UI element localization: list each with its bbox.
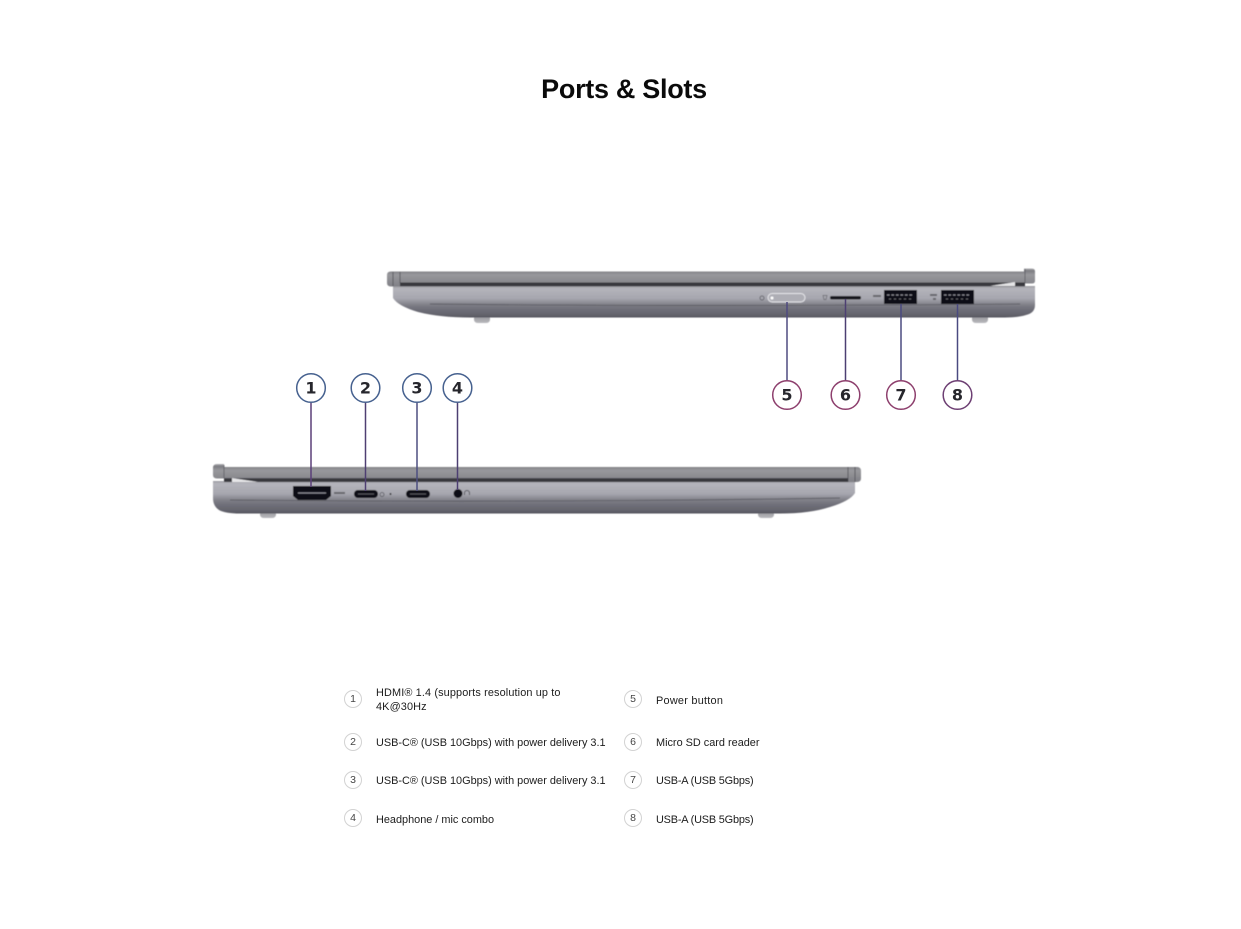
legend item 4: 4 — [350, 812, 356, 824]
USB-A port — [930, 290, 974, 304]
callout 4 — [443, 374, 472, 402]
laptop: right side view — [387, 268, 1035, 323]
lid — [213, 464, 861, 482]
legend item 3 — [344, 771, 606, 789]
callout 6: 6 — [840, 386, 851, 404]
feet — [474, 314, 988, 323]
base — [393, 286, 1035, 318]
legend item 5: Power button — [656, 695, 723, 707]
lid — [387, 268, 1035, 286]
callout 7: 7 — [895, 386, 907, 404]
legend item 7: 7 — [630, 774, 636, 786]
legend item 6: 6 — [630, 736, 636, 748]
legend item 2: 2 — [350, 736, 356, 748]
callout 6 — [831, 381, 860, 409]
hinge gap — [400, 282, 1025, 286]
legend item 8: 8 — [630, 812, 636, 824]
power button — [760, 294, 805, 302]
callout 1: 1 — [305, 378, 317, 398]
headphone jack — [454, 489, 470, 498]
hinge gap — [224, 478, 848, 482]
legend item 5 — [624, 690, 723, 708]
legend item 7: USB-A (USB 5Gbps) — [656, 775, 753, 787]
callout 3: 3 — [411, 378, 423, 398]
callout lines — [311, 299, 958, 491]
USB-A port — [873, 290, 917, 304]
callout 4: 4 — [452, 378, 463, 398]
HDMI port — [293, 486, 345, 500]
base — [213, 481, 855, 514]
highlight wedge — [232, 478, 258, 482]
legend item 4 — [344, 809, 494, 827]
callout 5 — [773, 381, 801, 409]
highlight wedge — [990, 282, 1015, 286]
title: Ports & Slots — [541, 74, 707, 104]
legend item 6 — [624, 733, 760, 751]
legend item 1: HDMI® 1.4 (supports resolution up to 4K@30Hz — [376, 687, 561, 713]
legend item 1: 1 — [350, 693, 356, 705]
legend item 8 — [624, 809, 753, 827]
callout 5: 5 — [781, 386, 793, 404]
callout 8 — [943, 381, 972, 409]
callout 2 — [351, 374, 380, 402]
callout 3 — [403, 374, 431, 402]
legend item 7 — [624, 771, 753, 789]
callout 7 — [887, 381, 915, 409]
legend item 8: USB-A (USB 5Gbps) — [656, 814, 753, 826]
laptop: left side view — [213, 464, 861, 518]
callout 1 — [297, 374, 325, 402]
legend item 3: USB-C® (USB 10Gbps) with power delivery 3.1 — [376, 775, 606, 787]
callout 2: 2 — [360, 378, 371, 398]
legend item 3: 3 — [350, 774, 356, 786]
legend item 4: Headphone / mic combo — [376, 814, 494, 826]
feet — [260, 510, 774, 518]
legend item 2: USB-C® (USB 10Gbps) with power delivery 3.1 — [376, 737, 606, 749]
USB-C port — [406, 490, 430, 498]
legend item 5: 5 — [630, 693, 636, 705]
legend item 6: Micro SD card reader — [656, 737, 760, 749]
micro SD slot — [823, 296, 861, 300]
callout 8: 8 — [952, 386, 963, 404]
legend item 2 — [344, 733, 606, 751]
USB-C port — [354, 490, 392, 498]
